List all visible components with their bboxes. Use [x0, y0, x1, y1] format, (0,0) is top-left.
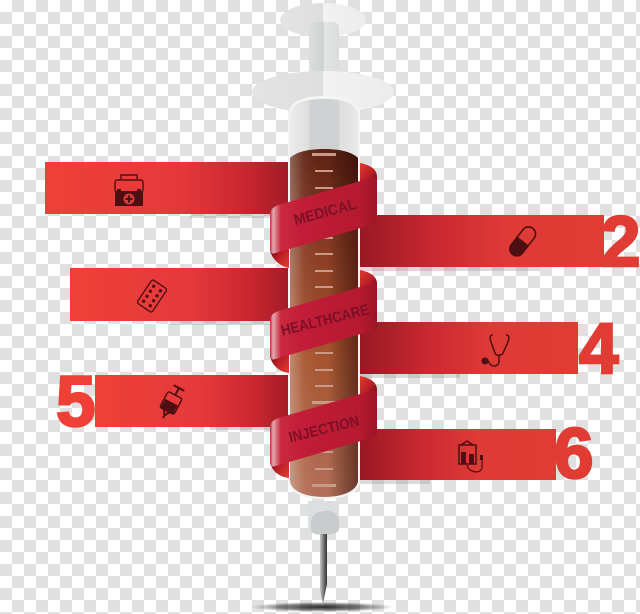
icon: blister pack — [137, 279, 167, 313]
icon: capsule — [507, 224, 538, 259]
curl top right — [360, 376, 377, 396]
ribbon wrap: healthcare — [270, 270, 377, 373]
curl bottom left — [270, 248, 289, 268]
scale ticks — [312, 153, 336, 487]
ground shadow — [250, 602, 394, 612]
ribbon wrap: medical — [270, 163, 377, 268]
label: MEDICAL: MEDICAL — [292, 196, 358, 229]
needle — [320, 534, 327, 604]
plunger top — [280, 3, 366, 76]
ribbon 6: right, IV unit — [360, 415, 594, 494]
ribbon 5: left, syringe — [56, 363, 291, 442]
number 4: 4 — [579, 310, 619, 389]
number 6: 6 — [554, 415, 594, 494]
ribbon shadows — [170, 214, 540, 484]
number 2: 2 — [601, 203, 640, 282]
curl bottom left — [270, 353, 289, 373]
flange — [252, 71, 394, 113]
ribbon 2: right, capsule — [360, 203, 640, 282]
number 5: 5 — [56, 363, 96, 442]
ribbon 3: left, pills — [70, 268, 291, 321]
curl bottom left — [270, 458, 289, 478]
barrel glass — [290, 99, 358, 158]
band — [270, 176, 377, 253]
icon: first aid kit — [115, 175, 143, 206]
curl top right — [360, 163, 377, 183]
band — [270, 282, 377, 359]
syringe — [250, 3, 394, 612]
curl top right — [360, 270, 377, 290]
ribbon 4: right, stethoscope — [360, 310, 619, 389]
ribbon 1: left, first aid kit — [45, 162, 291, 214]
label: INJECTION: INJECTION — [287, 413, 361, 446]
barrel — [288, 96, 360, 499]
icon: small syringe — [156, 384, 186, 422]
ribbon wrap: injection — [270, 376, 377, 478]
needle hub — [308, 501, 339, 535]
blood fill — [290, 149, 358, 497]
icon: medical device — [459, 441, 483, 472]
label: HEALTHCARE: HEALTHCARE — [279, 301, 371, 340]
band — [270, 389, 377, 466]
icon: stethoscope — [482, 335, 509, 366]
